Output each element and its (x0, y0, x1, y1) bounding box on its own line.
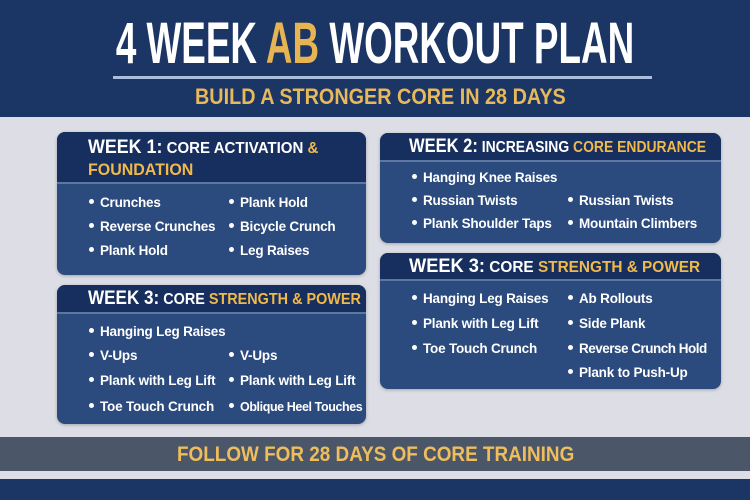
panel: week 1: Bicycle Crunch (240, 219, 335, 234)
panel: week 3 left: Plank with Leg Lift (240, 373, 355, 388)
panel: week 3 left: Plank with Leg Lift (100, 373, 215, 388)
heading week 2: WEEK 2: INCREASING CORE ENDURANCE (409, 136, 706, 157)
heading week 3 right: WEEK 3: CORE STRENGTH & POWER (409, 256, 700, 277)
panel: week 1: Plank Hold (240, 195, 308, 210)
panel: week 2: Hanging Knee Raises (423, 170, 557, 185)
panel: week 3 right: Hanging Leg Raises (423, 291, 548, 306)
panel: week 1: Crunches (100, 195, 161, 210)
heading week 1: FOUNDATION (88, 160, 193, 179)
panel: week 2: Russian Twists (579, 193, 673, 208)
panel: week 2: Russian Twists (423, 193, 517, 208)
panel: week 3 left: Toe Touch Crunch (100, 399, 214, 414)
footer text: FOLLOW FOR 28 DAYS OF CORE TRAINING (177, 443, 574, 466)
panel: week 1: Reverse Crunches (100, 219, 215, 234)
heading week 1 (88, 137, 318, 179)
panel: week 3 right: Plank to Push-Up (579, 365, 688, 380)
panel: week 3 left: Hanging Leg Raises (100, 324, 225, 339)
bottom band (0, 479, 750, 500)
panel: week 3 right: Side Plank (579, 316, 645, 331)
panel: week 3 left (57, 285, 366, 424)
panel: week 3 right (380, 253, 721, 389)
panel: week 2 (380, 133, 721, 243)
panel: week 1: Leg Raises (240, 243, 309, 258)
footer banner (0, 437, 750, 471)
panel: week 3 right: Toe Touch Crunch (423, 341, 537, 356)
header band (0, 0, 750, 117)
subtitle: BUILD A STRONGER CORE IN 28 DAYS (195, 84, 566, 109)
panel: week 3 left: Oblique Heel Touches (240, 400, 362, 414)
panel: week 3 right: Ab Rollouts (579, 291, 653, 306)
panel: week 3 right: Reverse Crunch Hold (579, 341, 707, 356)
panel: week 1: Plank Hold (100, 243, 168, 258)
panel: week 3 right: Plank with Leg Lift (423, 316, 538, 331)
panel: week 1 (57, 132, 366, 275)
panel: week 2: Plank Shoulder Taps (423, 216, 552, 231)
panel: week 3 left: V-Ups (240, 348, 277, 363)
panel: week 3 left: V-Ups (100, 348, 137, 363)
heading week 3 left: WEEK 3: CORE STRENGTH & POWER (88, 288, 361, 309)
title: 4 WEEK AB WORKOUT PLAN (116, 11, 634, 76)
heading week 1: WEEK 1: CORE ACTIVATION & (88, 137, 318, 158)
panel: week 2: Mountain Climbers (579, 216, 697, 231)
